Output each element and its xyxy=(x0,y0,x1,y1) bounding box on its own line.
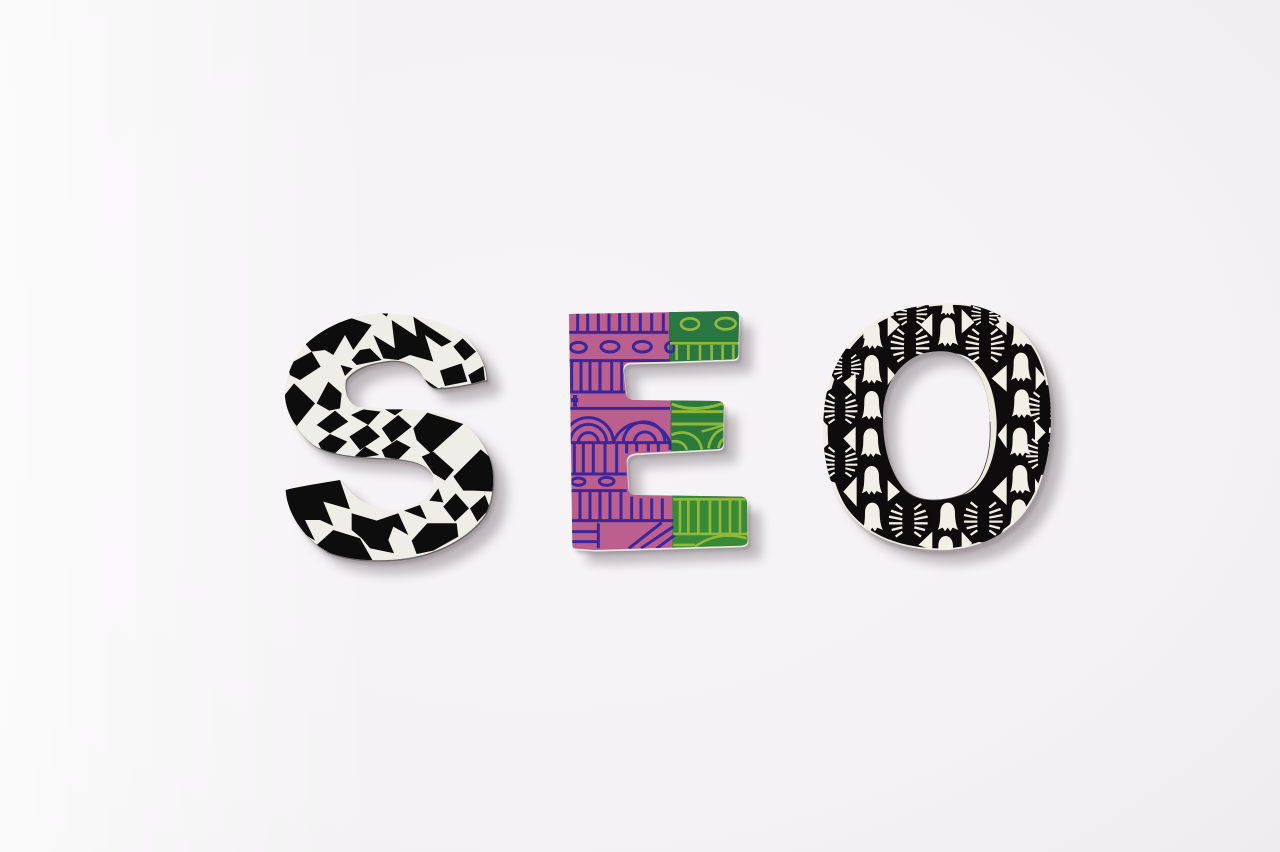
photo: SEO letters on white surface xyxy=(0,0,1070,770)
letter E xyxy=(563,307,762,564)
bell motifs xyxy=(861,295,1032,565)
body of S xyxy=(283,310,494,562)
green panels xyxy=(669,311,739,362)
leaf motifs xyxy=(820,292,1065,544)
shadow of S xyxy=(288,318,507,574)
letter S xyxy=(283,310,507,574)
shadow of O xyxy=(827,308,1065,564)
inner rim of O xyxy=(955,353,997,495)
body of E xyxy=(563,307,752,552)
body of O xyxy=(823,303,1051,550)
triangle motifs xyxy=(843,309,1046,550)
letter O xyxy=(820,292,1065,565)
shadow of E xyxy=(572,316,762,564)
